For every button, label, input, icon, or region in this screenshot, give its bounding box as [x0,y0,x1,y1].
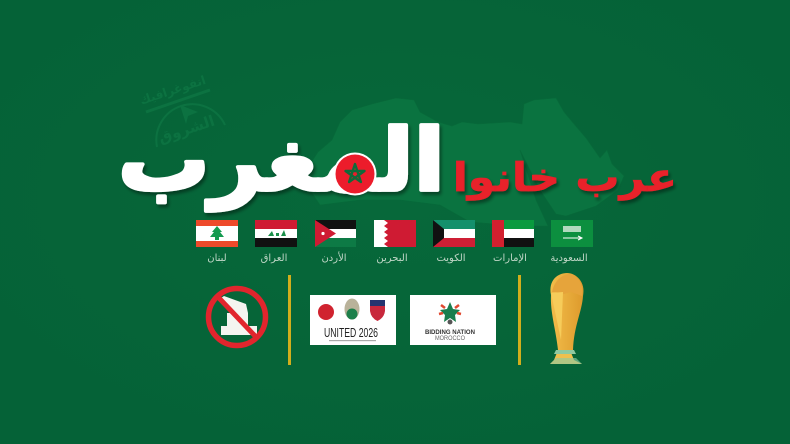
watermark logo: انفوغرافيك [138,73,208,108]
flag: Iraq [255,220,297,247]
logo: Morocco bid: BIDDING NATION [425,329,475,336]
flag: Kuwait [433,220,475,247]
icon: World Cup trophy [550,273,584,364]
icon: no ballot box [208,288,266,346]
country labels: البحرين [376,253,408,264]
country labels: الكويت [436,253,466,264]
divider right [518,275,521,365]
flag: Lebanon [196,220,238,247]
flag: Jordan [315,220,356,247]
flag: UAE [492,220,534,247]
flag: Bahrain [374,220,416,247]
subtitle: Arabs betrayed: عرب خانوا [453,154,677,201]
divider left [288,275,291,365]
flag: Saudi Arabia [551,220,593,247]
watermark logo: الشروق [156,112,217,147]
logo: United 2026: UNITED 2026 [324,325,378,340]
country labels: الإمارات [493,253,527,264]
country labels: لبنان [207,253,227,264]
country labels: العراق [261,253,287,264]
country labels: السعودية [550,253,588,264]
Moroccan flag circle [334,152,376,196]
logo: Morocco bid: MOROCCO [435,336,465,342]
watermark logo [138,73,225,147]
logo: Morocco bid [410,295,496,345]
logo: United 2026 [310,295,396,345]
country labels: الأردن [321,251,347,264]
map: Arab world [305,98,624,226]
title: Morocco: المغرب [118,111,445,211]
country labels [207,251,588,264]
